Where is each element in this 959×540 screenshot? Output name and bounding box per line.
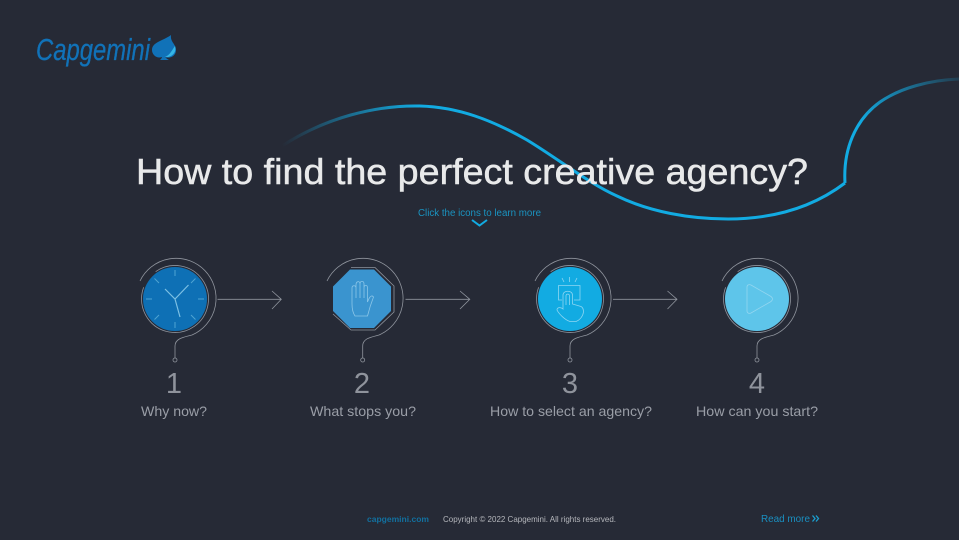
step label: How can you start? (696, 403, 818, 419)
read more link: Read more (761, 513, 810, 525)
step 2: what stops you (310, 258, 470, 419)
decorative wave curve (282, 79, 959, 219)
footer website link: capgemini.com (367, 514, 429, 524)
read more chevrons (812, 516, 818, 522)
arrow (613, 291, 677, 309)
step label: Why now? (141, 403, 207, 419)
icon: pointer click (523, 252, 617, 362)
icon: logo spade (152, 35, 176, 60)
instruction text: Click the icons to learn more (418, 208, 541, 219)
step number: 1 (166, 368, 182, 400)
icon: clock (128, 252, 222, 362)
step label: How to select an agency? (490, 403, 652, 419)
step 3: how to select an agency (490, 252, 677, 419)
icon: stop hand (327, 258, 403, 362)
logo: Capgemini: Capgemini (36, 32, 151, 67)
title: How to find the perfect creative agency? (136, 151, 808, 192)
step label: What stops you? (310, 403, 416, 419)
step number: 3 (562, 368, 578, 400)
icon: play (710, 252, 804, 362)
step 4: how can you start (696, 252, 818, 419)
icon: chevron down (472, 220, 487, 226)
step number: 2 (354, 368, 370, 400)
arrow (218, 291, 281, 309)
footer copyright: Copyright © 2022 Capgemini. All rights reserved. (443, 514, 616, 524)
step number: 4 (749, 368, 765, 400)
step 1: why now (128, 252, 281, 419)
arrow (406, 291, 470, 309)
